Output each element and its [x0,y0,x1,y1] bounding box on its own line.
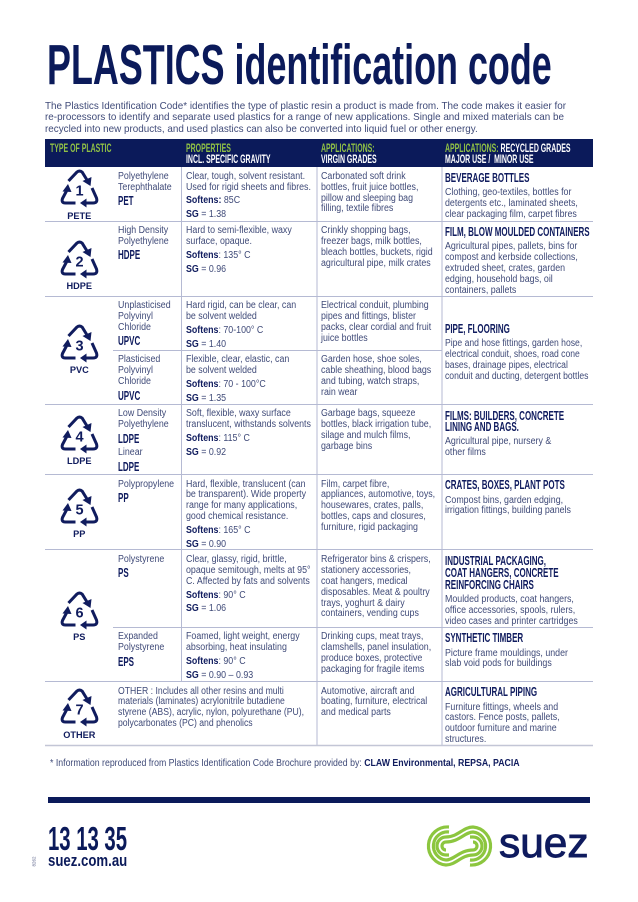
code: PP: PP [118,490,129,505]
icon: recycling code 2 [60,240,98,278]
properties: expanded: Softens: 90° C [186,656,245,667]
recycled heading: INDUSTRIAL PACKAGING, [445,553,546,568]
virgin applications: housewares, crates, palls, [321,500,423,511]
virgin applications: unplasticised [320,300,432,344]
recycled uses: edging, household bags, oil [445,274,553,285]
code: UPVC: UPVC [118,333,140,348]
plastic name: plasticised [118,354,160,387]
recycled uses: detergents etc., laminated sheets, [445,198,578,209]
properties: unplasticised: Hard rigid, can be clear, can [186,300,296,311]
properties [186,225,292,274]
properties: plasticised: SG = 1.35 [186,392,226,404]
recycled uses: Agricultural pipe, nursery & [445,436,551,447]
row: PP [60,477,571,550]
virgin applications: bottles, caps and closures, [321,511,426,522]
properties: expanded: Foamed, light weight, energy [186,631,299,642]
properties: SG = 0.92 [186,447,226,458]
plastic name: plasticised: Chloride [118,376,151,387]
virgin applications: expanded: Drinking cups, meat trays, [321,631,423,642]
properties: expanded: SG = 0.90 – 0.93 [186,670,253,680]
label: HDPE: HDPE [67,281,92,291]
properties: good chemical resistance. [186,511,288,522]
title: PLASTICS identification code [47,33,552,97]
properties: SG = 0.96 [186,264,226,274]
recycled uses [445,494,571,516]
properties: Hard, flexible, translucent (can [186,478,305,490]
plastic name: Polyethylene [118,236,169,247]
recycled uses: Clothing, geo-textiles, bottles for [445,187,571,198]
virgin applications: agricultural pipe, milk crates [321,258,431,269]
recycled heading: expanded: SYNTHETIC TIMBER [445,630,523,645]
table header band [45,139,593,167]
properties: Clear, tough, solvent resistant. [186,171,305,182]
properties: expanded: absorbing, heat insulating [186,642,286,653]
recycled uses [445,436,552,458]
virgin applications: freezer bags, milk bottles, [321,236,422,247]
row: LDPE [60,408,564,474]
recycled uses: structures. [445,734,486,745]
recycled uses: clear packaging film, carpet fibres [445,209,577,220]
row: PETE [60,170,578,220]
recycled heading: CRATES, BOXES, PLANT POTS [445,477,565,492]
recycled uses [445,187,578,220]
recycled heading: PIPE, FLOORING [445,321,510,336]
recycled uses [445,702,560,746]
recycled uses: Furniture fittings, wheels and [445,702,558,712]
recycled heading: BEVERAGE BOTTLES [445,170,529,185]
recycled uses: extruded sheet, crates, garden [445,263,565,274]
properties [186,171,310,220]
label: PVC: PVC [70,365,89,375]
description: OTHER : Includes all other resins and multi [118,686,284,696]
plastic name: Polyethylene [118,171,169,182]
icon: recycling code 7: 7 [75,702,83,718]
header: type of plastic: TYPE OF PLASTIC [50,141,111,155]
recycled uses: compost and kerbside collections, [445,252,578,263]
logo swirl [425,824,495,868]
code: UPVC plasticised: UPVC [118,388,140,403]
virgin applications: unplasticised: Electrical conduit, plumbing [321,300,429,311]
properties: translucent, withstands solvents [186,419,310,430]
recycled uses: Pipe and hose fittings, garden hose, [445,338,582,349]
recycled uses: bases, drainage pipes, electrical [445,360,568,371]
virgin applications [321,555,431,620]
label: PETE: PETE [67,210,91,220]
intro text [45,100,566,135]
properties: Used for rigid sheets and fibres. [186,182,310,193]
virgin applications: Film, carpet fibre, [321,478,389,490]
intro text: recycled into new products, and used plastics can also be converted into liquid fuel or other energy. [45,123,478,135]
virgin applications [321,408,431,452]
icon: recycling code 4 [60,416,98,454]
recycled uses: expanded: slab void pods for buildings [445,658,552,669]
recycled heading: COAT HANGERS, CONCRETE [445,565,559,580]
logo wordmark: suez [498,818,588,866]
description [118,686,304,730]
recycled uses: Agricultural pipes, pallets, bins for [445,241,577,252]
properties: Hard to semi-flexible, waxy [186,225,291,236]
virgin applications: plasticised: rain wear [321,387,357,398]
plastic name: unplasticised: Polyvinyl [118,311,153,322]
plastic name: Terephthalate [118,182,172,193]
virgin applications: disposables. Meat & poultry [321,587,430,598]
properties: unplasticised [186,300,296,350]
recycled heading [445,555,559,590]
properties: expanded [186,632,299,681]
plastic name: expanded: Polystyrene [118,642,164,653]
properties [186,555,310,615]
virgin applications: coat hangers, medical [321,576,408,587]
logo: suez [425,824,593,868]
footnote: * Information reproduced from Plastics Identification Code Brochure provided by: CLAW Environmental, REPSA, PACIA [50,758,520,768]
description: polycarbonates (PC) and phenolics [118,718,253,729]
properties: plasticised: be solvent welded [186,365,256,376]
virgin applications: expanded [321,632,431,676]
recycled heading: FILMS: BUILDERS, CONCRETE [445,408,564,423]
plastic name: unplasticised: Unplasticised [118,300,171,311]
recycled uses: office accessories, spools, rulers, [445,605,575,616]
icon: recycling code 6 [60,592,98,630]
recycled heading: LINING AND BAGS. [445,419,519,434]
recycled uses [445,338,588,382]
plastic name: Polystyrene [118,554,164,565]
virgin applications: silage and mulch films, [321,430,411,441]
label: OTHER: OTHER [63,730,95,740]
virgin applications: stationery accessories, [321,565,411,576]
icon: recycling code 2: 2 [75,254,83,270]
recycled heading: REINFORCING CHAIRS [445,577,534,592]
virgin applications: Carbonated soft drink [321,171,406,182]
properties: Softens: 115° C [186,433,249,444]
properties: Clear, glassy, rigid, brittle, [186,554,286,565]
recycled uses [445,241,578,296]
icon: recycling code 6: 6 [75,605,83,621]
virgin applications: furniture, rigid packaging [321,522,418,533]
properties: plasticised: Softens: 70 - 100°C [186,379,265,390]
code: PS: PS [118,565,129,580]
properties: unplasticised: Softens: 70-100° C [186,325,263,336]
plastic name: expanded: Expanded [118,631,158,642]
plastic name: Polypropylene [118,478,174,490]
header: properties: PROPERTIES [186,141,230,155]
properties: Softens: 85C [186,195,240,206]
virgin applications: unplasticised: pipes and fittings, blister [321,311,416,322]
virgin applications [321,225,433,269]
virgin applications: appliances, automotive, toys, [321,489,435,500]
header: recycled grades: MAJOR USE / MINOR USE [445,152,534,166]
virgin applications: Garbage bags, squeeze [321,408,415,419]
plastic name: High Density [118,225,168,236]
virgin applications: plasticised: cable sheathing, blood bags [321,365,431,376]
code: LDPE: LDPE [118,431,139,446]
properties: unplasticised: be solvent welded [186,311,256,322]
properties: surface, opaque. [186,236,251,247]
properties: Softens: 165° C [186,525,250,536]
properties: SG = 1.38 [186,209,226,220]
description: materials (laminates) acrylonitrile butadiene [118,696,285,707]
recycled uses: video cases and printer cartridges [445,616,578,627]
virgin applications: plasticised: and tubing, watch straps, [321,376,419,387]
recycled uses: outdoor furniture and marine [445,723,557,734]
recycled uses: Moulded products, coat hangers, [445,594,574,605]
recycled heading [445,408,564,434]
label: PP: PP [73,528,85,538]
properties: unplasticised: SG = 1.40 [186,338,226,350]
website: suez.com.au [48,852,127,870]
icon: recycling code 4: 4 [75,429,83,445]
virgin applications: bottles, fruit juice bottles, [321,182,418,193]
recycled uses: irrigation fittings, building panels [445,505,571,516]
code: HDPE: HDPE [118,247,140,262]
properties: Softens: 135° C [186,250,250,261]
plastic name [118,408,169,430]
plastic name: unplasticised [118,300,171,333]
recycled heading: AGRICULTURAL PIPING [445,684,537,699]
header: recycled grades: APPLICATIONS: RECYCLED GRADES [445,141,571,155]
properties: SG = 0.90 [186,538,226,550]
print code: 8262 [32,856,36,866]
properties: C. Affected by fats and solvents [186,576,309,587]
intro text: re-processors to identify and separate used plastics for a range of new applications. Single and mixed materials can be [45,111,564,123]
recycled uses: electrical conduit, shoes, road cone [445,349,580,360]
virgin applications: pillow and sleeping bag [321,193,413,204]
recycled uses: castors. Fence posts, pallets, [445,712,560,723]
plastic name: Low Density [118,408,166,419]
virgin applications [321,478,435,533]
recycled uses: conduit and ducting, detergent bottles [445,371,588,382]
row: PVC [60,300,588,404]
description: styrene (ABS), acrylic, nylon, polyurethane (PU), [118,707,304,718]
virgin applications: plasticised [321,354,431,398]
header: virgin grades: VIRGIN GRADES [321,152,377,166]
row: PS [60,553,578,680]
virgin applications: bleach bottles, buckets, rigid [321,247,433,258]
recycled uses: expanded: Picture frame mouldings, under [445,648,568,658]
label: LDPE: LDPE [67,456,92,466]
phone number: 13 13 35 [48,820,127,857]
virgin applications: plasticised: Garden hose, shoe soles, [321,354,422,365]
virgin applications: garbage bins [321,441,372,452]
recycled uses: Compost bins, garden edging, [445,494,563,506]
virgin applications: containers, vending cups [321,608,419,619]
properties: Softens: 90° C [186,590,245,601]
footer bar [48,797,590,803]
properties: opaque semitough, melts at 95° [186,565,310,576]
icon: recycling code 1: 1 [75,184,83,200]
plastic name: linear: Linear [118,447,143,458]
virgin applications: expanded: produce boxes, protective [321,653,422,664]
plastic name: expanded [118,632,164,654]
icon: recycling code 5: 5 [75,502,83,518]
intro text: The Plastics Identification Code* identifies the type of plastic resin a product is made from. The code makes it easier for [45,100,566,112]
code: EPS: EPS [118,654,134,669]
virgin applications: expanded: clamshells, panel insulation, [321,642,431,653]
virgin applications: trays, yoghurt & dairy [321,598,405,609]
header: virgin grades [321,141,377,166]
virgin applications: boating, furniture, electrical [321,696,427,707]
recycled uses: expanded [445,648,568,670]
plastic name: plasticised: Polyvinyl [118,365,153,376]
recycled uses: other films [445,447,486,458]
virgin applications [321,171,418,214]
header: properties: INCL. SPECIFIC GRAVITY [186,152,270,166]
virgin applications: unplasticised: packs, clear cordial and fruit [321,322,431,333]
properties: plasticised [186,354,289,404]
plastic name [118,225,169,247]
header: properties [186,141,270,166]
row: OTHER [45,681,593,746]
icon: recycling code 3 [60,324,98,362]
header: recycled grades [445,141,571,166]
icon: recycling code 7 [61,689,98,726]
virgin applications: expanded: packaging for fragile items [321,664,424,675]
recycled heading: FILM, BLOW MOULDED CONTAINERS [445,224,590,239]
plastic name [118,171,172,193]
code: PET: PET [118,193,134,208]
properties [186,478,306,550]
code: linear LDPE: LDPE [118,459,139,474]
properties: SG = 1.06 [186,603,226,614]
properties: Soft, flexible, waxy surface [186,408,290,419]
icon: recycling code 5 [60,488,98,526]
plastic name: plasticised: Plasticised [118,354,160,365]
virgin applications: filling, textile fibres [321,203,393,214]
properties: range for many applications, [186,500,297,511]
icon: recycling code 3: 3 [75,338,83,354]
plastic name: unplasticised: Chloride [118,322,151,333]
recycled uses [445,595,578,627]
properties [186,408,311,458]
recycled uses: containers, pallets [445,285,516,296]
virgin applications: and medical parts [321,707,391,718]
virgin applications: bottles, black irrigation tube, [321,419,431,430]
virgin applications: unplasticised: juice bottles [321,333,368,344]
icon: recycling code 1 [60,170,98,208]
row: HDPE [60,224,590,296]
header: virgin grades: APPLICATIONS: [321,141,375,155]
properties: be transparent). Wide property [186,489,306,500]
virgin applications: Crinkly shopping bags, [321,225,411,236]
virgin applications: Automotive, aircraft and [321,686,414,696]
properties: plasticised: Flexible, clear, elastic, can [186,354,289,365]
virgin applications [321,686,427,719]
virgin applications: Refrigerator bins & crispers, [321,554,431,565]
label: PS: PS [73,632,85,642]
plastic name: Polyethylene [118,419,169,430]
